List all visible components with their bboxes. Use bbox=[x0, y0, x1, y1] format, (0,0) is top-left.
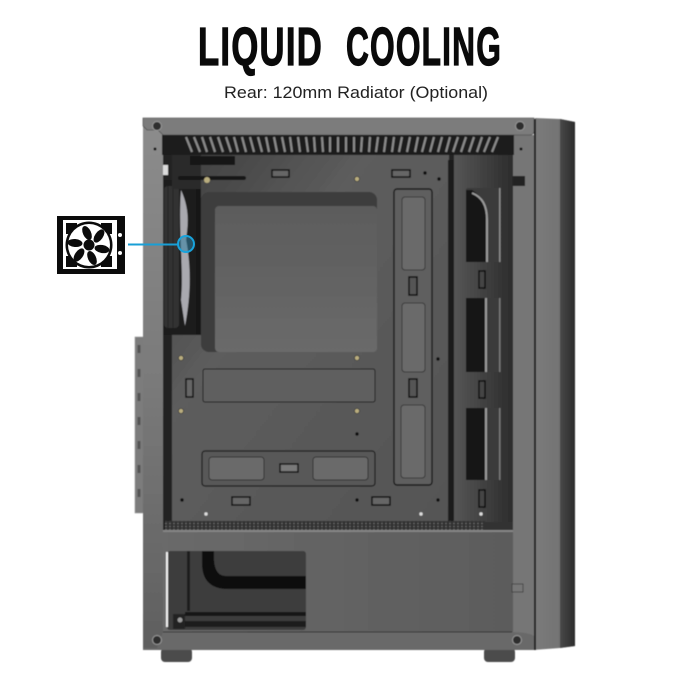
case feet bbox=[161, 648, 515, 662]
right frame bbox=[512, 135, 534, 650]
callout: rear fan marker bbox=[178, 236, 194, 252]
rear fan bbox=[163, 165, 201, 335]
tray slots bbox=[186, 170, 410, 505]
cable routing channel bbox=[394, 189, 432, 485]
bottom panel bbox=[143, 632, 534, 650]
computer case bbox=[135, 118, 575, 662]
power supply shroud bbox=[163, 530, 513, 633]
power supply opening bbox=[166, 551, 306, 630]
callout: fan icon bbox=[57, 216, 125, 274]
top of rear IO area bbox=[172, 155, 246, 189]
standoff screws bbox=[178, 176, 360, 414]
title: LIQUID bbox=[198, 17, 323, 77]
expansion plate bbox=[203, 369, 375, 402]
right compartment bbox=[454, 154, 514, 530]
hard drive cage behind the case bbox=[135, 337, 144, 513]
small tray holes bbox=[180, 171, 441, 502]
case interior bbox=[160, 132, 515, 634]
title bbox=[198, 17, 502, 77]
left frame bbox=[143, 122, 163, 648]
lower cable plate bbox=[202, 451, 375, 486]
callout: connector line bbox=[128, 244, 178, 246]
large CPU cutout bbox=[201, 192, 377, 352]
top vent bbox=[186, 137, 498, 152]
white tray rivets bbox=[204, 512, 423, 516]
bottom vent bbox=[165, 521, 485, 531]
front panel bbox=[533, 118, 575, 650]
subtitle: Rear: 120mm Radiator (Optional) bbox=[224, 83, 488, 102]
title: COOLING bbox=[346, 17, 502, 77]
motherboard tray bbox=[163, 155, 449, 522]
divider strip bbox=[448, 160, 454, 522]
top panel bbox=[143, 118, 534, 155]
